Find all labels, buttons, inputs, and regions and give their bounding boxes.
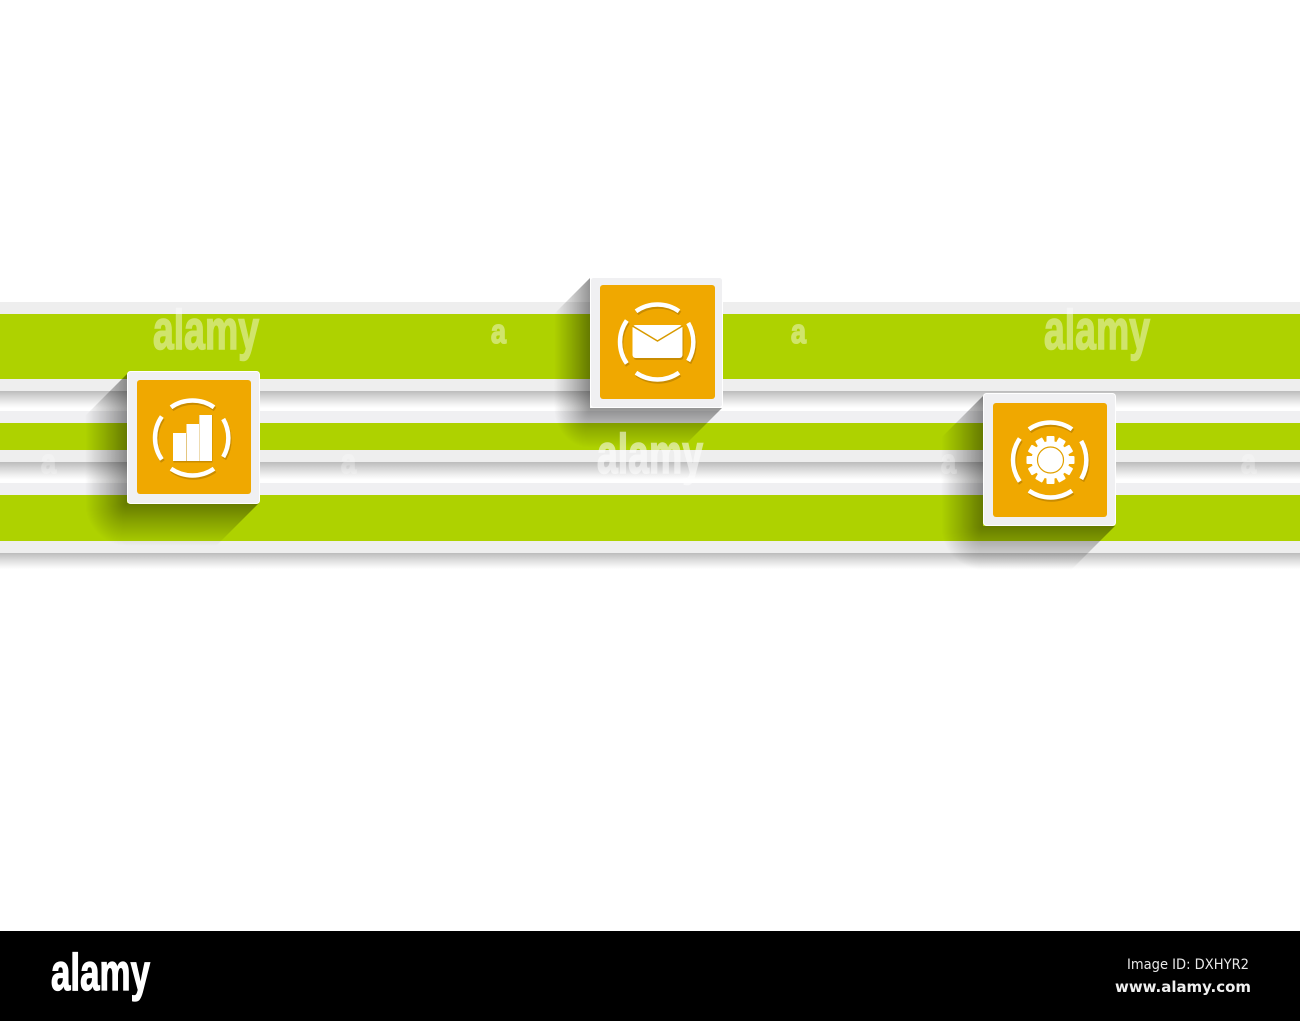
watermark: small a marks: a	[791, 313, 807, 351]
watermark: alamy left: alamy	[153, 298, 259, 361]
icon: gear ring	[1013, 423, 1087, 499]
watermark: small a marks: a	[491, 313, 507, 351]
watermark: small a marks: a	[341, 443, 357, 481]
watermark: alamy right: alamy	[1044, 298, 1150, 361]
watermark: alamy centre: alamy	[597, 422, 703, 485]
card: gear icon	[984, 394, 1116, 526]
footer url: www.alamy.com	[1115, 978, 1251, 996]
card: mail icon	[590, 278, 722, 408]
long shadow: chart card	[85, 374, 259, 546]
footer bar	[0, 931, 1300, 1021]
icon: chart ring and bars	[155, 401, 229, 477]
long shadow: gear card	[941, 396, 1115, 570]
watermark: small a marks: a	[41, 443, 57, 481]
horizontal stripes	[0, 302, 1300, 572]
watermark: small a marks: a	[941, 443, 957, 481]
footer logo: alamy: alamy	[51, 944, 150, 1002]
long shadow: mail card	[554, 278, 722, 448]
watermark: small a marks: a	[1241, 443, 1257, 481]
icon: envelope ring	[620, 305, 694, 381]
watermark: small a marks	[41, 313, 1257, 481]
footer image id: Image ID: DXHYR2	[1127, 957, 1249, 973]
card: chart icon	[128, 372, 260, 504]
